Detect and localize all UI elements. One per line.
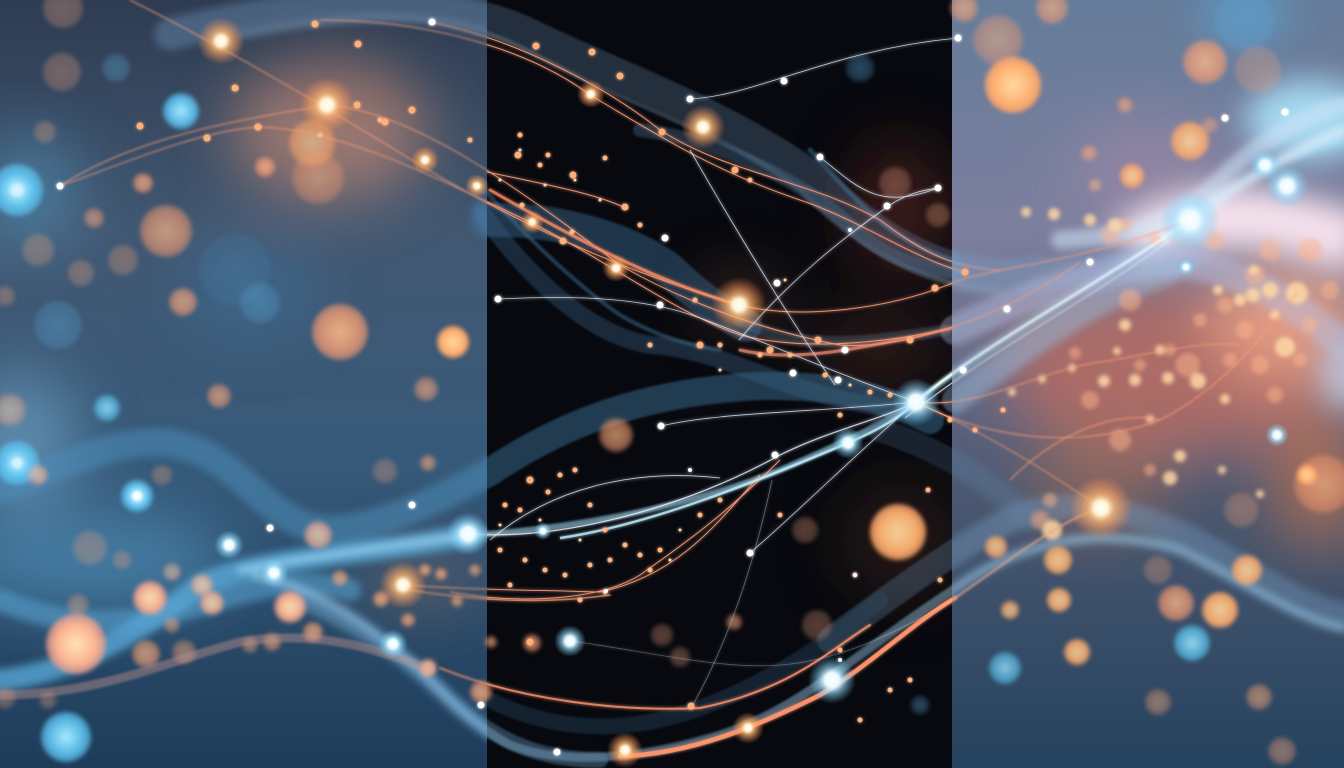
glows: left panel — [0, 60, 480, 610]
glows: warm haze in dark centre — [700, 140, 960, 600]
cluster: soft particles on right side — [1008, 179, 1339, 540]
glows: right panel colour fields — [1000, 0, 1344, 550]
